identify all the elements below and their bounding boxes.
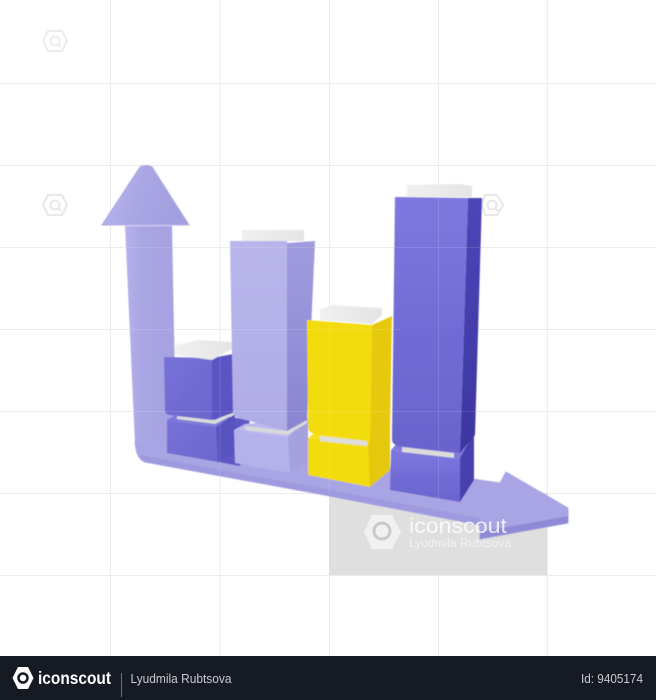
white cap [407,184,472,197]
white cap [175,340,232,360]
icon: upward arrow [102,166,189,443]
upper block [392,197,482,453]
grid overlay on artwork [100,165,480,500]
white separator [177,412,233,424]
upper block [230,241,315,431]
footer logo icon [12,667,34,689]
footer author: Lyudmila Rubtsova [130,671,232,686]
arrow axes [102,166,568,539]
bar 2: light purple tall [230,230,315,473]
lower block [390,433,475,502]
shadow on platform behind bar 2 [218,415,250,466]
watermark logo [364,515,401,549]
footer id: Id: 9405174 [581,671,643,686]
bar 1: dark purple short [164,340,250,466]
watermark: middle left [43,195,67,215]
bar 3: yellow [307,305,392,487]
white separator [402,447,454,458]
artwork group [102,166,568,539]
white cap [242,230,304,241]
footer divider [121,673,122,697]
icon: downward arrow head and base [135,436,568,539]
watermark panel [329,493,547,575]
upper block [164,354,233,420]
white separator front [320,436,367,446]
lower block [234,418,308,473]
central iconscout watermark [364,515,512,550]
white cap [320,305,382,324]
white separator [245,420,307,435]
watermark: top left [43,31,67,51]
footer bar [0,656,656,700]
watermark: middle right [482,195,503,215]
footer brand: iconscout [38,668,111,688]
upper block [307,316,392,442]
white separator [320,436,367,446]
lower block [167,414,235,462]
watermark brand text: iconscout [409,515,507,538]
lower block [308,425,390,487]
bar 4: dark purple tallest [390,184,482,502]
watermark author text: Lyudmila Rubtsova [409,538,512,550]
